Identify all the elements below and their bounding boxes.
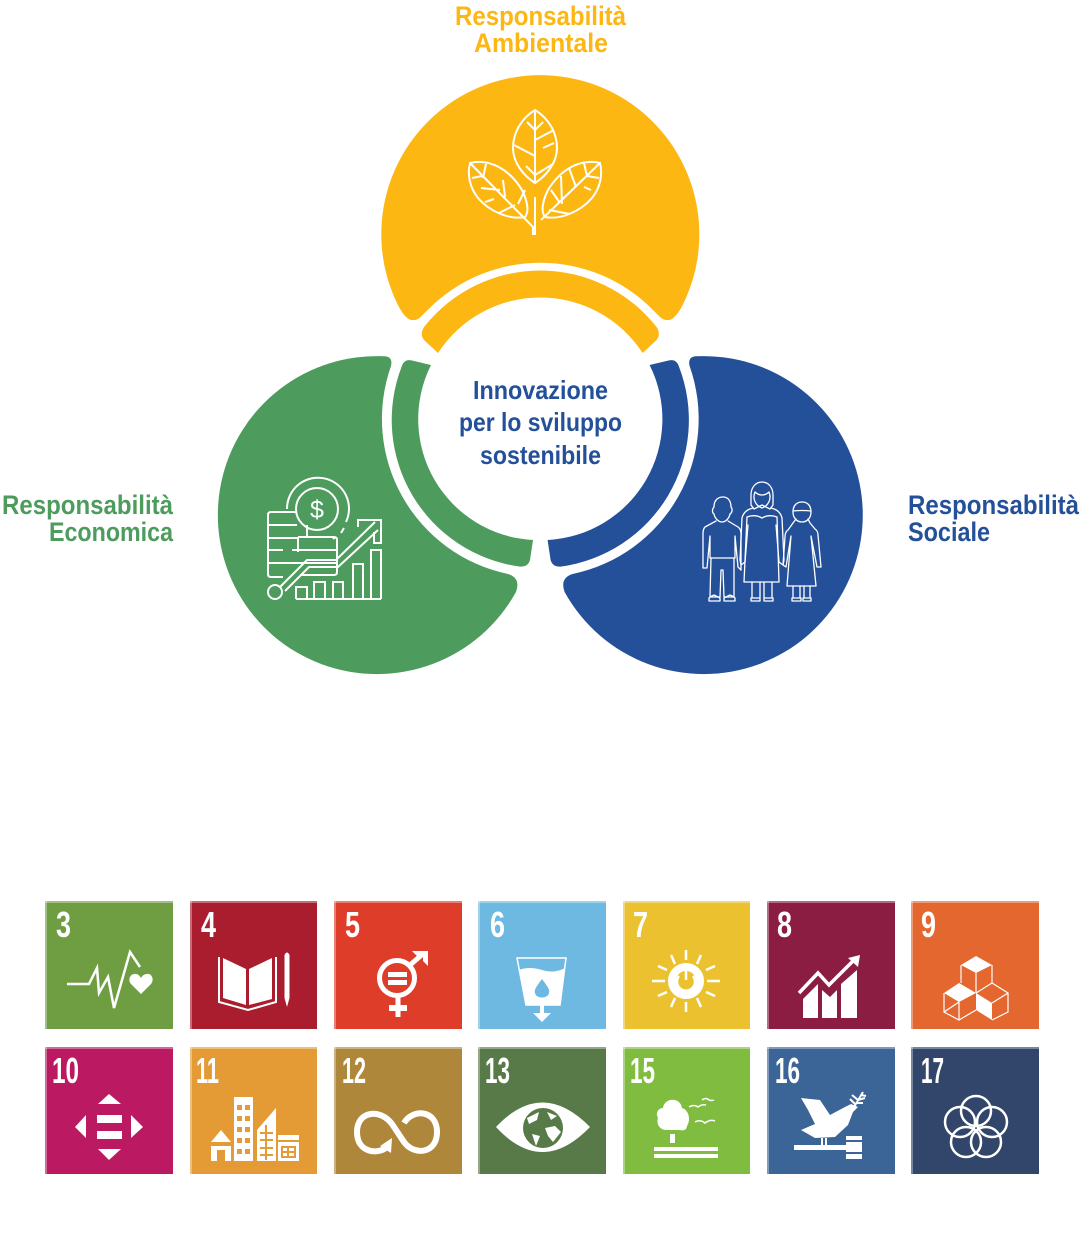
- boy: [703, 497, 741, 601]
- tile background: [334, 901, 462, 1029]
- icon: infinity arrow: [357, 1113, 437, 1153]
- tile: SDG 15: 15: [630, 1050, 655, 1091]
- tile: SDG 8: 8: [777, 904, 792, 945]
- tile: SDG 15: [623, 1047, 750, 1174]
- tile background: [334, 1047, 462, 1174]
- panel: environmental yellow ring segment: [422, 271, 659, 353]
- panel: economic green ring segment: [392, 360, 533, 567]
- tile: SDG 4: 4: [201, 904, 216, 945]
- tile: SDG 10: [45, 1047, 173, 1174]
- heading: Responsabilità Ambientale: [455, 1, 627, 58]
- tile background: [911, 1047, 1039, 1174]
- heading: Responsabilità Economica: Economica: [49, 517, 174, 547]
- tile: SDG 5: [334, 901, 462, 1029]
- center text: Innovazione per lo sviluppo sostenibile: sostenibile: [480, 440, 601, 470]
- heading: Responsabilità Sociale: Sociale: [908, 517, 990, 547]
- girl: [783, 502, 821, 601]
- icon: book and pencil: [219, 952, 290, 1010]
- tile background: [190, 901, 317, 1029]
- tile: SDG 11: [190, 1047, 317, 1174]
- tile background: [623, 1047, 750, 1174]
- icon: tree and birds: [654, 1098, 718, 1158]
- tile: SDG 6: [478, 901, 606, 1029]
- tile: SDG 9: [911, 901, 1039, 1029]
- tile: SDG 17: 17: [921, 1050, 944, 1091]
- tile: SDG 12: 12: [342, 1050, 366, 1091]
- tile: SDG 12: [334, 1047, 462, 1174]
- tile: SDG 7: [623, 901, 750, 1029]
- panel: environmental yellow lobe: [381, 75, 699, 320]
- heading: Responsabilità Ambientale: Ambientale: [474, 28, 608, 58]
- tile: SDG 9: 9: [921, 904, 936, 945]
- heading: Responsabilità Economica: Responsabilità: [2, 490, 174, 520]
- icon: five linked rings: [945, 1096, 1007, 1157]
- heading: Responsabilità Sociale: [908, 490, 1080, 547]
- panel: economic green lobe: [218, 356, 517, 674]
- tile background: [911, 901, 1039, 1029]
- tile: SDG 5: 5: [345, 904, 360, 945]
- tile: SDG 17: [911, 1047, 1039, 1174]
- icon: sun with power symbol: [652, 950, 720, 1012]
- tile background: [623, 901, 750, 1029]
- tile: SDG 4: [190, 901, 317, 1029]
- icon: three leaves: [469, 110, 601, 235]
- icon: eye with globe: [496, 1102, 590, 1152]
- tile background: [45, 901, 173, 1029]
- tile: SDG 10: 10: [52, 1050, 79, 1091]
- icon: growth chart: [799, 955, 860, 1018]
- tile: SDG 3: [45, 901, 173, 1029]
- tile: SDG 13: [478, 1047, 606, 1174]
- icon: reduced inequalities: [75, 1094, 143, 1160]
- tile background: [767, 901, 895, 1029]
- tile: SDG 8: [767, 901, 895, 1029]
- icon: gender equality: [380, 951, 428, 1017]
- center text: Innovazione per lo sviluppo sostenibile: [459, 375, 622, 470]
- panel: social blue ring segment: [548, 360, 689, 567]
- icon: coins and growth chart: [268, 478, 381, 599]
- icon: family of three: [703, 482, 821, 601]
- icon: city buildings: [211, 1097, 299, 1161]
- center text: Innovazione per lo sviluppo sostenibile: Innovazione: [473, 375, 608, 405]
- icon: cubes: [944, 956, 1008, 1020]
- heading: Responsabilità Economica: [2, 490, 174, 547]
- icon: coins and growth chart: $: [310, 496, 324, 524]
- center text: Innovazione per lo sviluppo sostenibile: per lo sviluppo: [459, 407, 622, 437]
- tile background: [190, 1047, 317, 1174]
- icon: water glass: [517, 958, 566, 1022]
- tile background: [478, 1047, 606, 1174]
- icon: dove and gavel: [794, 1092, 866, 1159]
- panel: social blue lobe: [563, 356, 863, 674]
- tile background: [45, 1047, 173, 1174]
- tile: SDG 11: 11: [196, 1050, 219, 1091]
- tile background: [767, 1047, 895, 1174]
- tile background: [478, 901, 606, 1029]
- heading: Responsabilità Ambientale: Responsabilità: [455, 1, 627, 31]
- tile: SDG 6: 6: [490, 904, 505, 945]
- woman: [740, 482, 784, 601]
- tile: SDG 16: 16: [775, 1050, 800, 1091]
- tile: SDG 7: 7: [633, 904, 648, 945]
- tile: SDG 16: [767, 1047, 895, 1174]
- icon: heartbeat: [67, 952, 153, 1008]
- tile: SDG 3: 3: [56, 904, 71, 945]
- tile: SDG 13: 13: [485, 1050, 510, 1091]
